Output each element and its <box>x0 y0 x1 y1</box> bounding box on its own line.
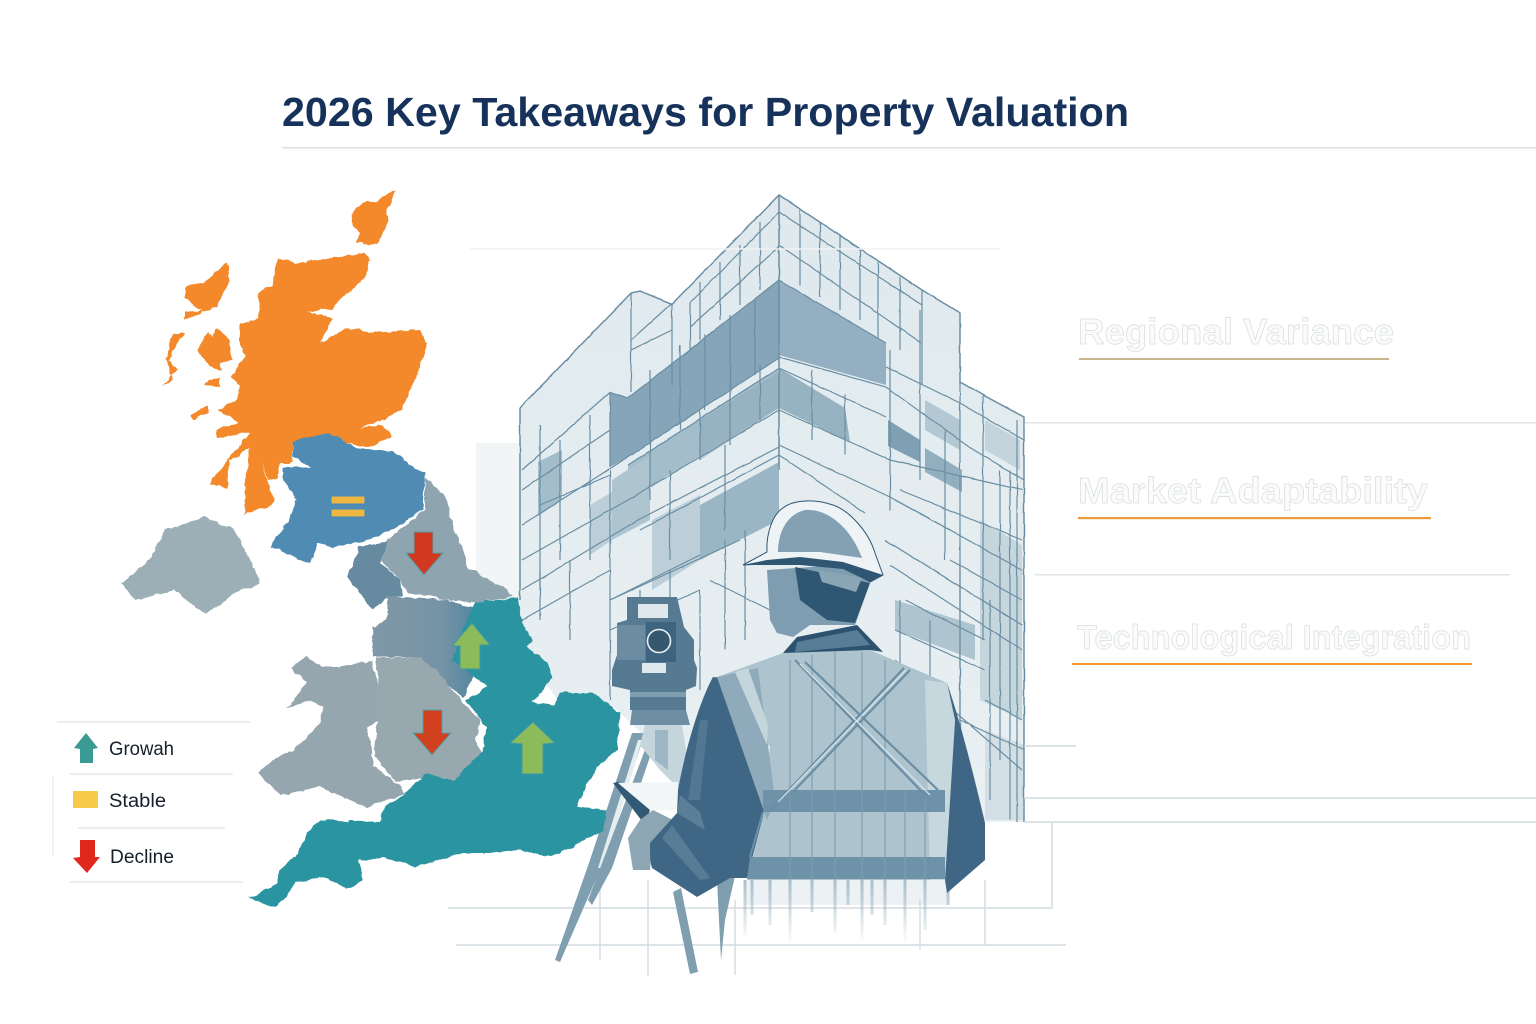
icon: growth arrow south <box>510 722 555 774</box>
hand-held tablet <box>613 782 650 825</box>
drips below figure <box>745 880 950 945</box>
region: Wales (grey) <box>258 657 405 808</box>
icon: stable <box>73 791 98 808</box>
label: decline: Decline <box>110 847 174 868</box>
region: north-west England (slate) <box>347 542 403 610</box>
region: Scotland (orange) <box>162 190 427 515</box>
takeaway: Technological Integration: Technological Integration <box>1077 619 1471 657</box>
building sketch <box>448 195 1536 976</box>
lens <box>648 630 670 652</box>
icon: stable equals <box>331 496 365 517</box>
divider <box>1025 422 1536 424</box>
collar <box>783 625 883 655</box>
icon: decline arrow north <box>406 532 443 575</box>
icon: growth arrow midlands <box>452 623 490 669</box>
title rule <box>282 147 1536 149</box>
hard hat <box>743 501 883 582</box>
instrument body <box>612 597 697 710</box>
region: West Midlands (grey) <box>374 658 482 785</box>
icon: growth <box>74 733 98 763</box>
neck and hair <box>767 565 870 637</box>
dark glazing panels <box>610 280 779 467</box>
left sleeve <box>650 677 768 897</box>
icon: decline <box>73 840 100 873</box>
region: Northern Ireland (grey) <box>122 517 260 615</box>
takeaway: Regional Variance: Regional Variance <box>1078 311 1394 352</box>
region: north-east England (grey) <box>380 477 513 602</box>
surveyor total station on tripod <box>555 597 735 974</box>
safety vest <box>717 650 955 880</box>
UK map <box>122 190 620 907</box>
building line work <box>520 195 1024 822</box>
building base lines <box>448 249 1536 976</box>
title: 2026 Key Takeaways for Property Valuation <box>282 89 1129 135</box>
right sleeve <box>945 683 985 893</box>
hand <box>628 810 673 870</box>
region: England south and east (teal) <box>248 598 620 907</box>
surveyor figure <box>613 501 985 945</box>
region: Scotland central (blue) <box>270 432 425 563</box>
label: stable: Stable <box>109 791 166 812</box>
label: growth: Growah <box>109 739 174 760</box>
divider <box>1035 574 1510 576</box>
takeaway: Market Adaptability: Market Adaptability <box>1078 470 1428 511</box>
region: central Midlands (slate grey) <box>372 596 480 698</box>
icon: decline arrow west midlands <box>413 710 451 755</box>
tripod legs <box>555 725 735 974</box>
legend <box>52 722 250 882</box>
